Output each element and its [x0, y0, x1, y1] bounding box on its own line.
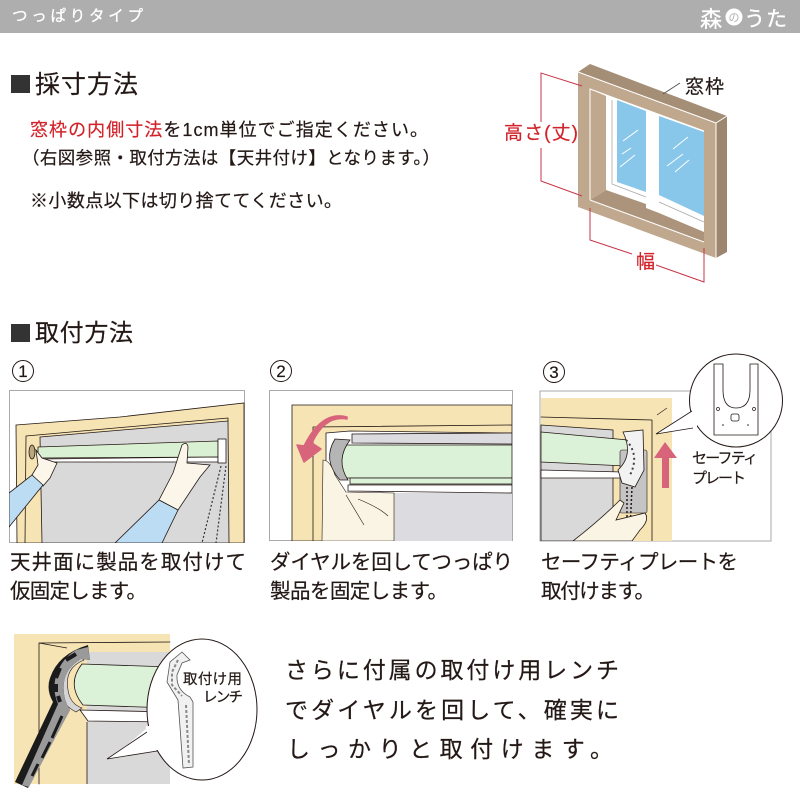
step 2 number	[270, 360, 292, 382]
text block: measuring instructions	[22, 120, 440, 211]
left hand	[32, 450, 57, 486]
callout: wrench: 取付け用	[183, 671, 242, 688]
text block: measuring instructions: （右図参照・取付方法は【天井付け】となります。）	[22, 148, 440, 168]
dimension: width: 幅	[636, 251, 655, 273]
dimension: height	[504, 73, 582, 196]
brand logo: うた	[744, 8, 787, 31]
step 3 illustration	[540, 354, 782, 541]
heading: installation method: 取付方法	[35, 320, 133, 347]
step 1 caption	[10, 551, 246, 603]
dimension: width	[590, 208, 704, 282]
step 3 caption	[541, 551, 738, 603]
step 3 number	[544, 362, 564, 382]
text block: wrench instructions: しっかりと取付けます。	[287, 736, 613, 762]
step 2 illustration	[270, 390, 512, 541]
label: safety plate: プレート	[692, 470, 746, 487]
brand logo: の	[728, 12, 740, 24]
text block: measuring instructions: ※小数点以下は切り捨ててください。	[30, 191, 342, 211]
arrow: slide plate up	[654, 442, 677, 488]
step 2 caption: ダイヤルを回してつっぱり	[270, 551, 513, 574]
label: window frame	[663, 76, 724, 98]
step 2 number: 2	[276, 362, 286, 381]
callout: wrench: レンチ	[203, 690, 243, 706]
label: window frame: 窓枠	[685, 76, 724, 98]
brand logo	[700, 7, 787, 32]
wrench illustration	[14, 634, 257, 788]
callout: wrench	[107, 639, 257, 780]
text block: wrench instructions: さらに付属の取付け用レンチ	[285, 657, 619, 683]
text block: measuring instructions: 窓枠の内側寸法を1cm単位でご指定ください。	[30, 120, 428, 140]
header bar	[0, 0, 800, 33]
step 3 caption: 取付けます。	[541, 580, 655, 603]
label: safety plate	[692, 450, 758, 487]
header label: つっぱりタイプ	[12, 7, 143, 25]
wrench	[15, 645, 90, 788]
step 3 caption: セーフティプレートを	[541, 551, 738, 574]
text block: wrench instructions: でダイヤルを回して、確実に	[285, 697, 619, 723]
label: safety plate: セーフティ	[692, 450, 758, 467]
step 1 illustration	[9, 390, 244, 543]
window frame	[578, 64, 727, 258]
brand logo: 森	[700, 7, 722, 32]
callout: safety plate	[656, 354, 782, 447]
step 1 caption: 天井面に製品を取付けて	[10, 551, 246, 574]
right hand	[159, 443, 210, 510]
step 1 number: 1	[18, 362, 28, 381]
window frame diagram	[504, 64, 727, 282]
text block: wrench instructions	[285, 657, 619, 762]
step 2 caption: 製品を固定します。	[270, 580, 448, 603]
step 1 number	[12, 360, 34, 382]
step 1 caption: 仮固定します。	[10, 580, 147, 603]
step 3 number: 3	[549, 363, 559, 382]
step 2 caption	[270, 551, 513, 603]
heading: measuring method: 採寸方法	[35, 71, 138, 99]
dimension: height: 高さ(丈)	[504, 122, 578, 144]
arrow: rotate dial	[297, 416, 347, 462]
